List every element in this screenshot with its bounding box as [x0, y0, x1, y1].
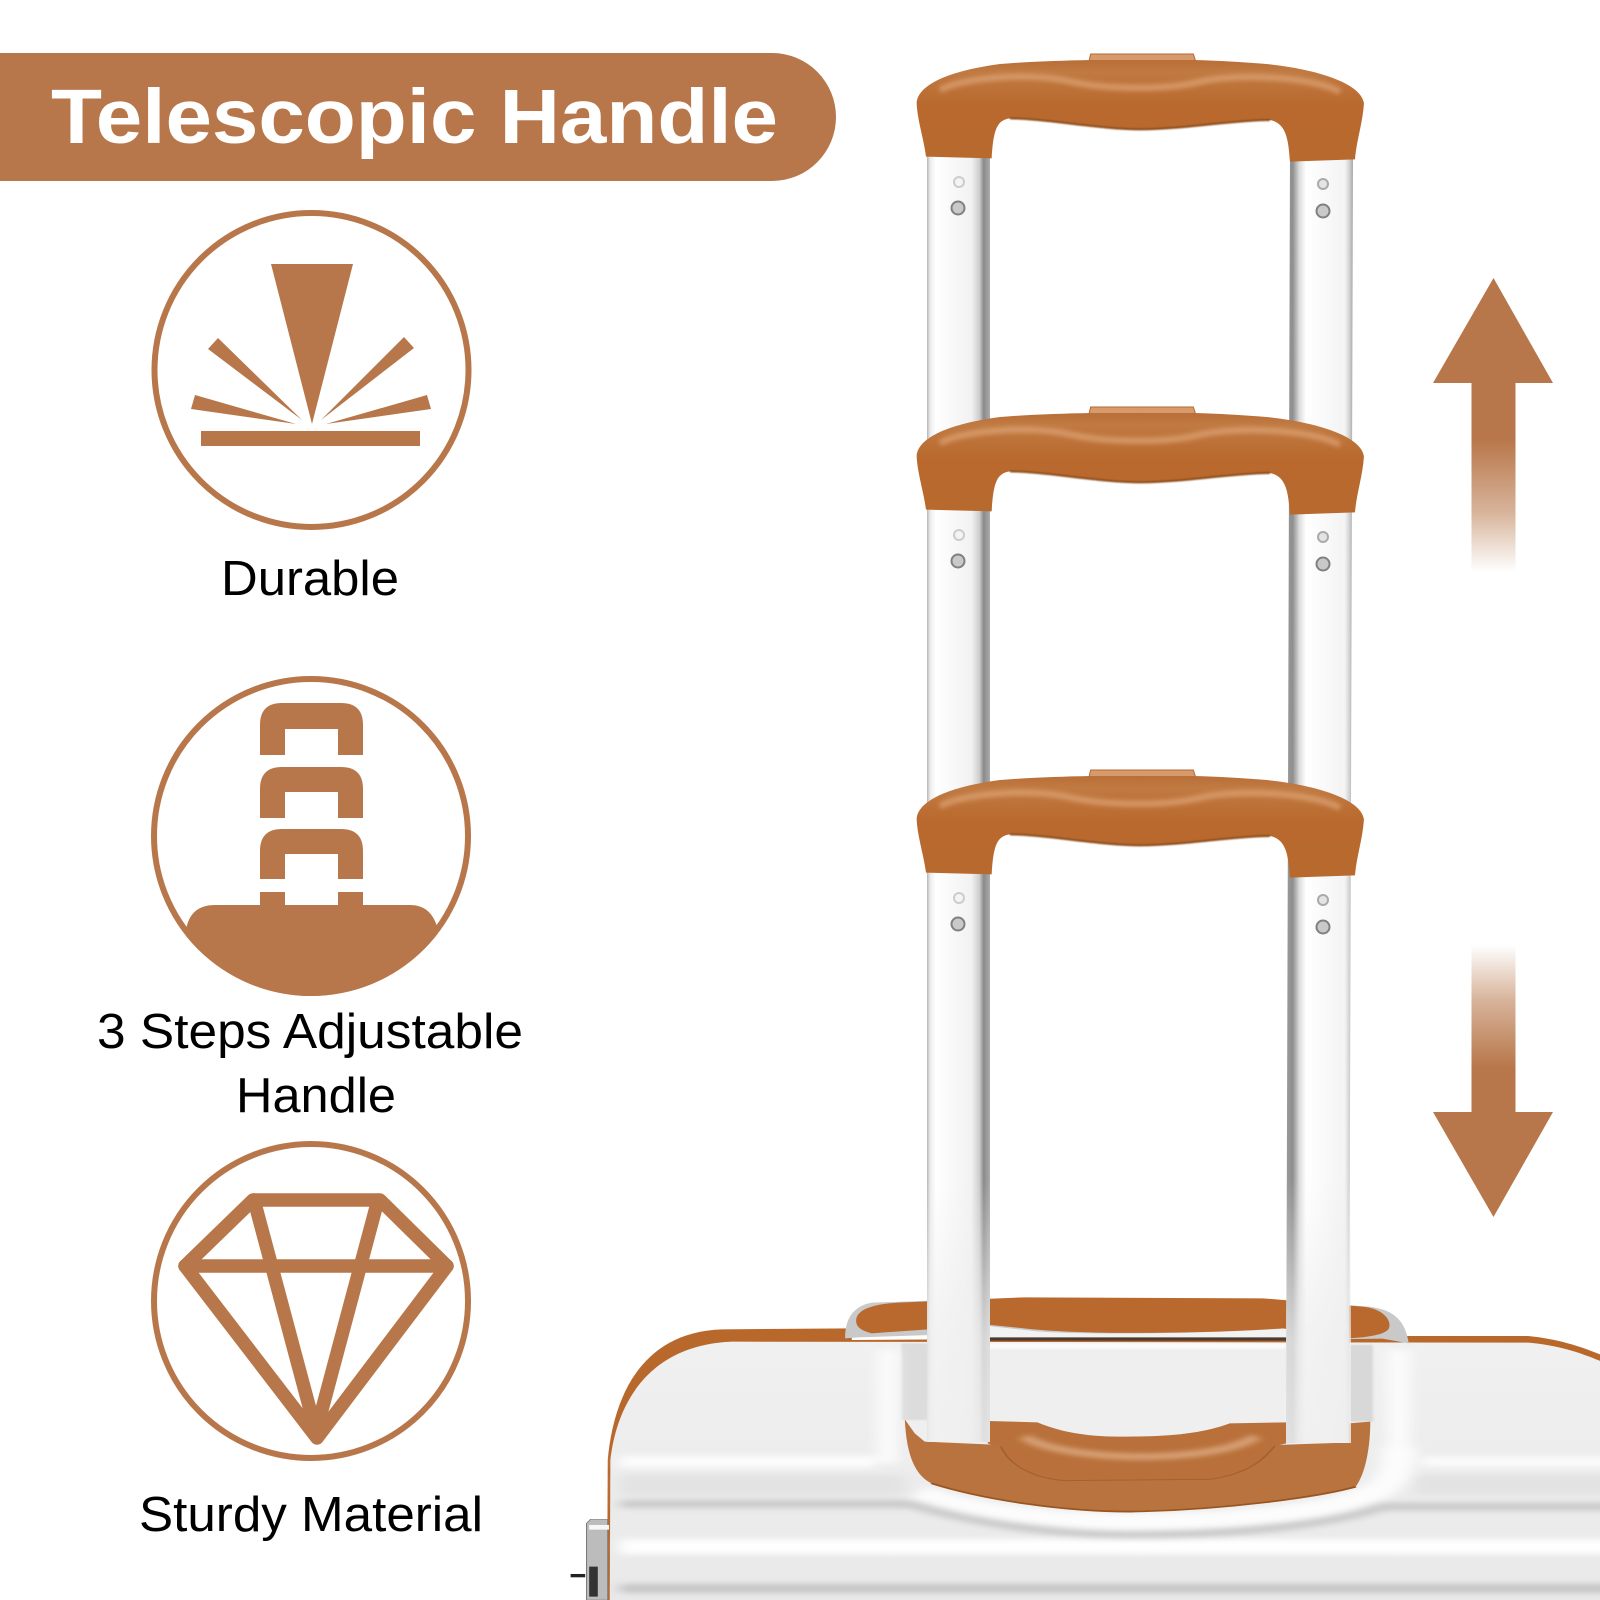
feature: adjustable handle [97, 679, 523, 1123]
left pole [927, 150, 990, 1442]
orange top trim [607, 1328, 1600, 1600]
feature: durable [154, 213, 468, 606]
telescopic poles [927, 150, 1353, 1443]
rivets [952, 177, 1330, 934]
icon: diamond [154, 1144, 468, 1458]
shell shading [620, 1350, 1600, 1588]
title text: Telescopic Handle [51, 74, 778, 160]
icon: three step handle [154, 679, 468, 1000]
white shell [610, 1342, 1600, 1600]
carry handle [845, 1297, 1409, 1343]
arrow: down [1433, 945, 1553, 1217]
pole lower wash [927, 1180, 1351, 1443]
icon: impact burst [154, 213, 468, 527]
right pole [1286, 150, 1353, 1443]
label: handle: Handle [236, 1069, 396, 1123]
handle position 2 [917, 407, 1364, 515]
handle position 1 [917, 54, 1364, 162]
recess panel [901, 1343, 1372, 1443]
lock [571, 1519, 609, 1600]
arrow: up [1433, 278, 1553, 572]
title banner [0, 53, 836, 181]
label: sturdy material: Sturdy Material [139, 1488, 483, 1542]
label: 3 steps adjustable: 3 Steps Adjustable [97, 1005, 523, 1059]
feature: sturdy material [139, 1144, 483, 1542]
handle tray [905, 1419, 1370, 1512]
label: durable: Durable [221, 552, 399, 606]
handle position 3 [917, 770, 1364, 878]
suitcase body [571, 1297, 1600, 1600]
